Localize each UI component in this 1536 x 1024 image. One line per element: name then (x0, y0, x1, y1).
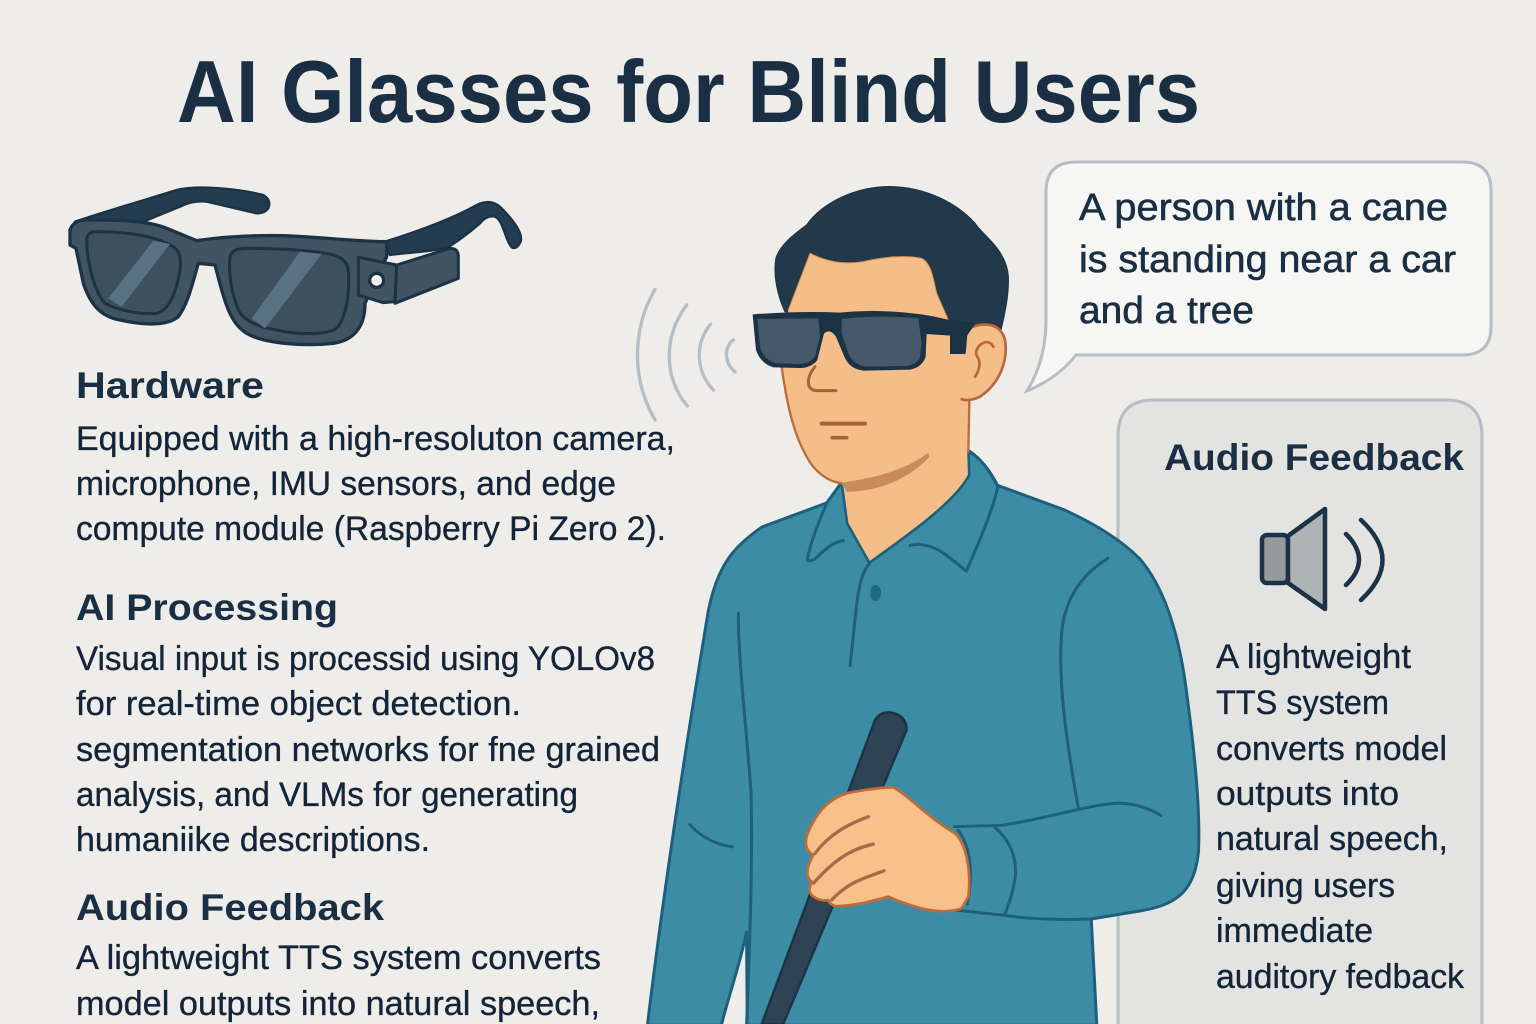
person illustration (647, 187, 1199, 1024)
heading: hardware: Hardware (76, 365, 264, 406)
ear (962, 325, 1006, 400)
bubble text: is standing near a car (1079, 239, 1456, 281)
text block: AI processing description: humaniike descriptions. (76, 821, 430, 859)
chin shadow (842, 453, 929, 492)
hand (806, 787, 969, 911)
text block: AI processing description: for real-time object detection. (76, 685, 521, 723)
text block: AI processing description: Visual input is processid using YOLOv8 (76, 640, 655, 678)
panel text: auditory fedback (1216, 958, 1465, 996)
text block: audio feedback description: model outputs into natural speech, (76, 985, 600, 1023)
bubble text: A person with a cane (1079, 187, 1448, 229)
icon: speaker (1262, 509, 1382, 609)
text block: AI processing description (76, 640, 660, 859)
heading: audio feedback: Audio Feedback (76, 887, 384, 928)
panel text: outputs into (1216, 775, 1399, 813)
text block: audio feedback description (76, 939, 601, 1023)
text block: AI processing description: segmentation networks for fne grained (76, 731, 660, 769)
section: audio feedback (76, 887, 601, 1023)
heading: AI processing: AI Processing (76, 587, 338, 628)
panel text: A lightweight (1216, 638, 1412, 676)
panel: audio feedback (1118, 400, 1482, 1024)
sunglasses (753, 312, 975, 370)
panel text (1216, 638, 1465, 996)
panel text: converts model (1216, 730, 1447, 768)
nose and mouth (808, 367, 836, 391)
text block: hardware description: microphone, IMU sensors, and edge (76, 465, 616, 503)
shirt (647, 447, 1199, 1024)
text block: audio feedback description: A lightweight TTS system converts (76, 939, 601, 977)
section: AI processing (76, 587, 660, 859)
panel text: natural speech, (1216, 820, 1448, 858)
section: hardware (76, 365, 675, 548)
bubble text (1079, 187, 1456, 332)
panel text: giving users (1216, 867, 1395, 905)
panel text: TTS system (1216, 684, 1389, 722)
text block: hardware description: compute module (Raspberry Pi Zero 2). (76, 510, 666, 548)
cane (762, 712, 907, 1024)
text block: hardware description (76, 420, 675, 548)
icon: smart glasses with camera (70, 188, 521, 345)
head with sunglasses (753, 187, 1008, 492)
text block: AI processing description: analysis, and VLMs for generating (76, 776, 578, 814)
face (782, 253, 970, 490)
panel text: immediate (1216, 912, 1373, 950)
text block: hardware description: Equipped with a high-resoluton camera, (76, 420, 675, 458)
speech bubble (1027, 162, 1491, 391)
bubble text: and a tree (1079, 290, 1254, 332)
title: AI Glasses for Blind Users (177, 42, 1200, 141)
panel heading: Audio Feedback (1164, 437, 1464, 478)
icon: sound waves (637, 289, 735, 420)
hair (775, 187, 1008, 333)
hand holding white cane (762, 712, 969, 1024)
